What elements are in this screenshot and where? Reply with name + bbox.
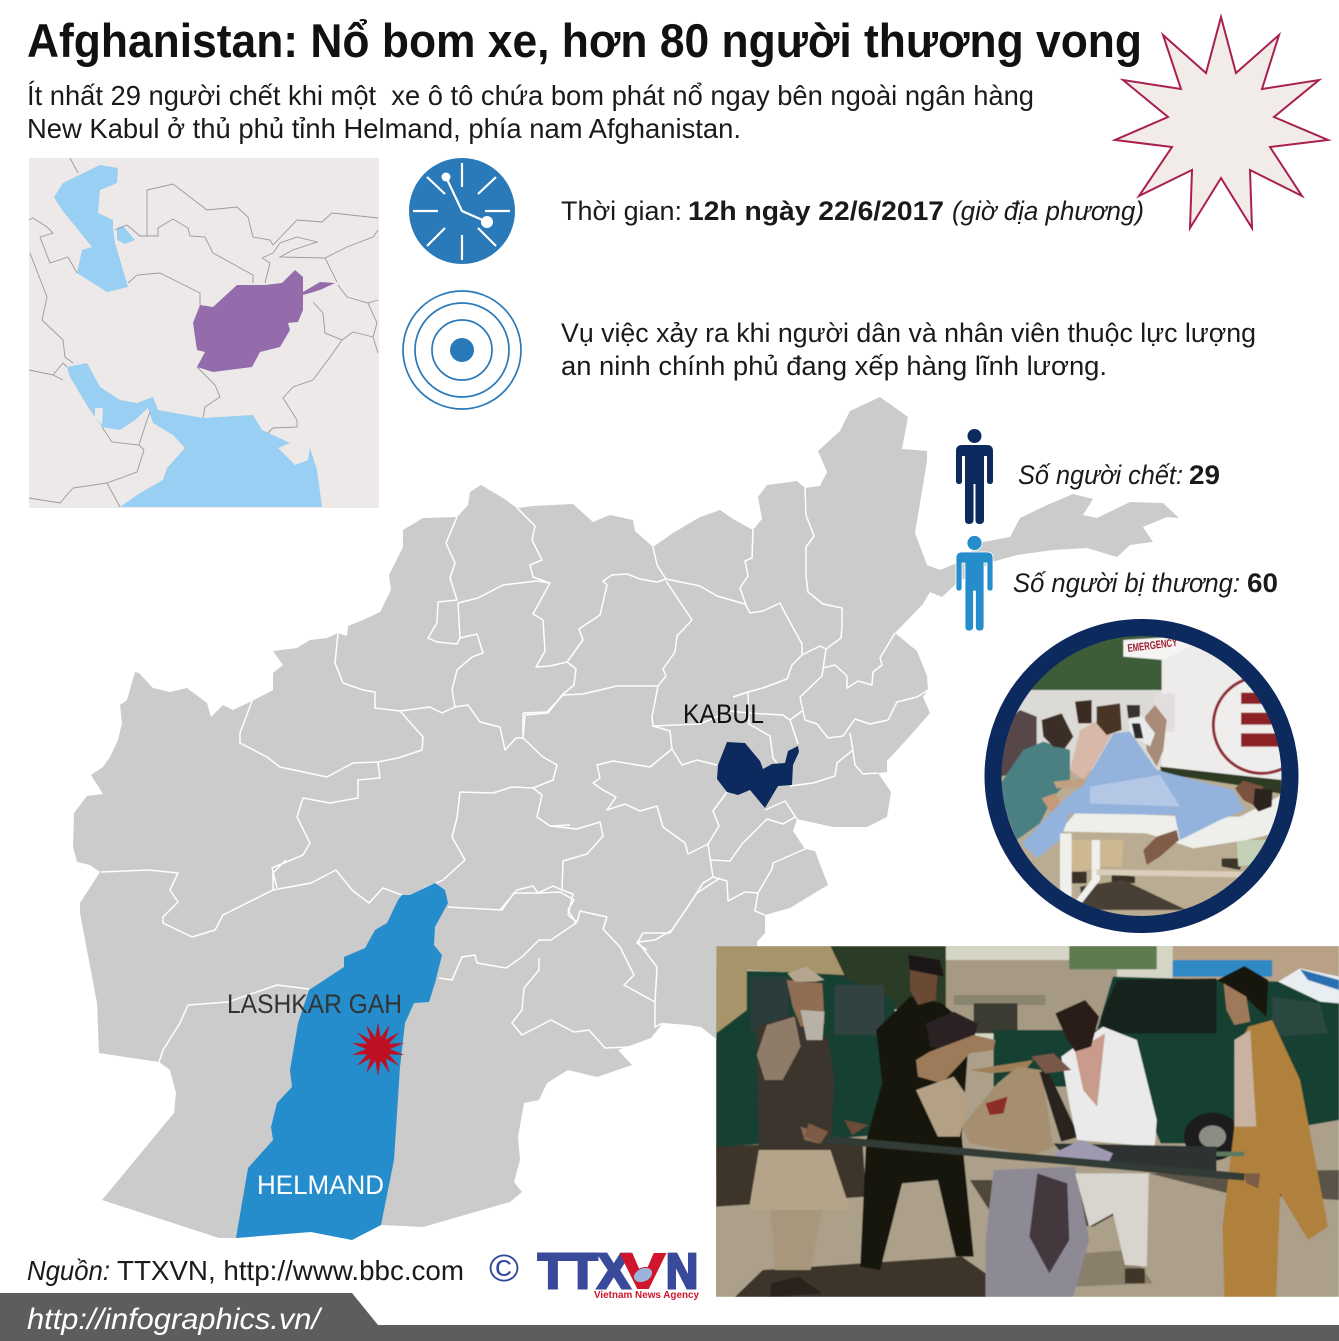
footer bar: [0, 1293, 1339, 1341]
time text: Thời gian:: [561, 196, 682, 226]
copyright symbol: ©: [489, 1248, 519, 1290]
injured count: Số người bị thương:: [1013, 568, 1240, 598]
logo: TTXVN: N: [666, 1245, 698, 1299]
icon: explosion marker: [352, 1022, 404, 1076]
logo: TTXVN: V: [621, 1245, 665, 1299]
source line: Nguồn:: [27, 1255, 110, 1286]
province: Helmand: [236, 883, 448, 1240]
label: LASHKAR GAH: LASHKAR GAH: [227, 989, 402, 1019]
time text: [561, 196, 1144, 226]
inset country borders: [29, 158, 378, 507]
label: KABUL: KABUL: [683, 699, 764, 729]
logo: TTXVN: [538, 1245, 699, 1301]
inset Afghanistan: [193, 270, 335, 372]
icon: person dead: [956, 429, 993, 524]
injured count: 60: [1247, 568, 1278, 598]
intro text: Ít nhất 29 người chết khi một xe ô tô chứa bom phát nổ ngay bên ngoài ngân hàng: [27, 80, 1034, 111]
title: Afghanistan: Nổ bom xe, hơn 80 người thương vong: [27, 14, 1142, 67]
footer url: http://infographics.vn/: [27, 1303, 323, 1336]
source line: TTXVN, http://www.bbc.com: [117, 1255, 464, 1286]
logo: TTXVN: TTX: [538, 1245, 630, 1299]
intro text: [27, 80, 1034, 144]
country shape: [73, 397, 1179, 1240]
main map of Afghanistan: [73, 397, 1179, 1240]
rectangular photo: stretcher: [715, 940, 1339, 1297]
photo ring: [993, 628, 1290, 924]
inset land: [29, 158, 379, 508]
province borders: [101, 488, 928, 1062]
time text: 12h ngày 22/6/2017: [688, 196, 944, 226]
circular photo: patient on gurney: [980, 610, 1310, 940]
inset water: [54, 165, 322, 507]
icon: clock: [409, 158, 515, 264]
inset locator map: [29, 158, 379, 508]
dead count: 29: [1189, 460, 1220, 490]
event text: an ninh chính phủ đang xếp hàng lĩnh lương.: [561, 351, 1107, 381]
icon: person injured: [956, 536, 993, 631]
province: Kabul: [717, 742, 799, 808]
time text: (giờ địa phương): [952, 196, 1144, 226]
logo: TTXVN: Vietnam News Agency: [594, 1290, 699, 1301]
intro text: New Kabul ở thủ phủ tỉnh Helmand, phía nam Afghanistan.: [27, 113, 741, 144]
event text: [561, 318, 1256, 381]
label: HELMAND: HELMAND: [257, 1170, 384, 1200]
dead count: Số người chết:: [1018, 460, 1183, 490]
hospital sign: EMERGENCY: [1127, 637, 1178, 655]
icon: starburst decoration: [1115, 17, 1328, 228]
icon: target location: [403, 291, 521, 409]
event text: Vụ việc xảy ra khi người dân và nhân viên thuộc lực lượng: [561, 318, 1256, 348]
